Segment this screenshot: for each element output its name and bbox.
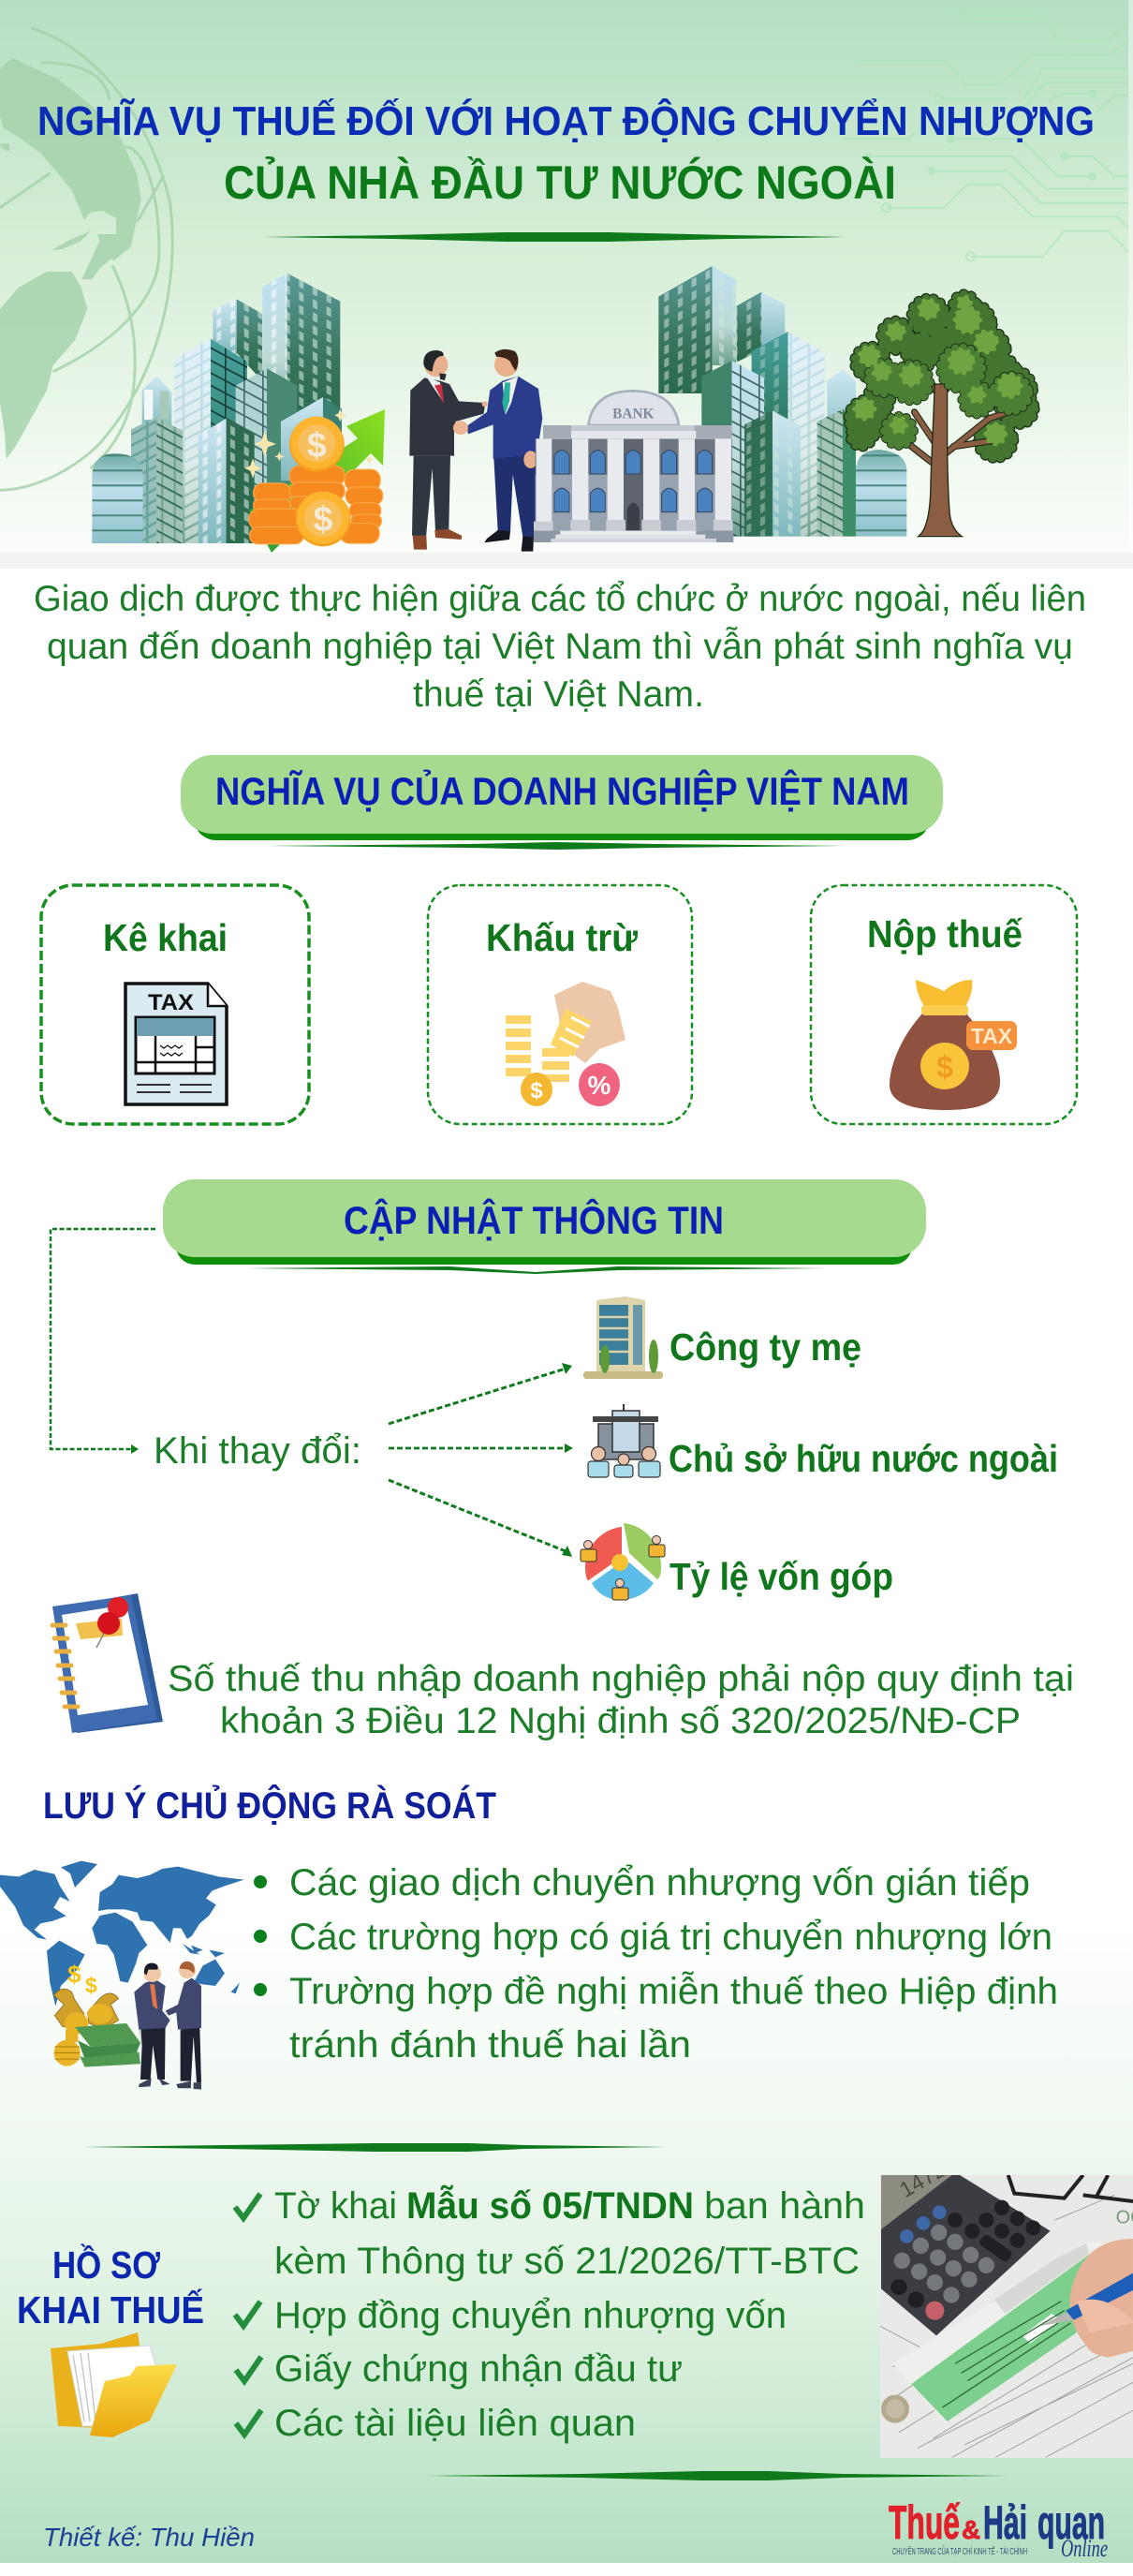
- money and bags: $: [85, 1973, 97, 1997]
- illustration: right buildings: [658, 266, 906, 537]
- heading: tax dossier: KHAI THUẾ: [17, 2288, 204, 2332]
- arrow: update connector: [51, 1229, 155, 1454]
- title: CỦA NHÀ ĐẦU TƯ NƯỚC NGOÀI: [224, 155, 896, 209]
- credit: designer: Thiết kế: Thu Hiền: [43, 2523, 255, 2552]
- icon: tax money bag: $: [936, 1050, 953, 1084]
- photo: calculator and tax form: [880, 2157, 1133, 2458]
- two investors: [134, 1962, 201, 2090]
- item 3: Giấy chứng nhận đầu tư: [274, 2348, 683, 2390]
- icon: office tower: [583, 1296, 663, 1379]
- icon: folder: [51, 2332, 177, 2437]
- bullet 2: Các trường hợp có giá trị chuyển nhượng lớn: [289, 1917, 1052, 1958]
- text: when changed: Khi thay đổi:: [154, 1430, 361, 1472]
- bullet 3: [254, 1970, 1058, 2065]
- icon: capital pie: [581, 1523, 665, 1600]
- text: tax note: [168, 1659, 1074, 1741]
- heading pill: update: [163, 1179, 926, 1274]
- intro text: [34, 579, 1086, 715]
- icon: world map and investors: [0, 1861, 244, 2090]
- arrow: to capital ratio: [389, 1480, 572, 1557]
- leaf highlights: [855, 297, 1021, 444]
- heading pill: obligations: [181, 755, 943, 850]
- panel: Kê khai: Kê khai: [103, 916, 228, 959]
- panel: Khấu trừ: Khấu trừ: [486, 916, 638, 959]
- logo: Thuế & Hải quan: Thuế: [889, 2496, 960, 2549]
- item 1: ban hành: [704, 2185, 865, 2227]
- text: tax note: khoản 3 Điều 12 Nghị định số 320/2025/NĐ-CP: [220, 1701, 1021, 1741]
- label: parent company: Công ty mẹ: [670, 1325, 861, 1369]
- icon: coins and hand: $: [530, 1078, 543, 1103]
- logo: Thuế & Hải quan: CHUYÊN TRANG CỦA TẠP CHÍ KINH TẾ - TÀI CHÍNH: [892, 2545, 1027, 2557]
- item 1: kèm Thông tư số 21/2026/TT-BTC: [274, 2241, 860, 2282]
- title: [37, 96, 1095, 209]
- label: capital ratio: Tỷ lệ vốn góp: [670, 1555, 893, 1598]
- logo: Thuế & Hải quan: &: [962, 2515, 980, 2544]
- logo: Thuế & Hải quan: Hải: [983, 2496, 1027, 2549]
- bullet 3: tránh đánh thuế hai lần: [289, 2024, 691, 2065]
- icon: tax form: TAX: [148, 990, 194, 1015]
- branches: [896, 381, 1018, 462]
- heading pill: update: CẬP NHẬT THÔNG TIN: [344, 1197, 724, 1242]
- panel: Khấu trừ: [428, 885, 692, 1124]
- logo: Thuế & Hải quan: [889, 2496, 1108, 2562]
- bullet 1: Các giao dịch chuyển nhượng vốn gián tiếp: [289, 1862, 1030, 1903]
- icon: growth arrow: [249, 409, 385, 553]
- panel: Nộp thuế: Nộp thuế: [867, 912, 1023, 955]
- icon: gold coins: $: [314, 499, 333, 539]
- item 1: Mẫu số 05/TNDN: [406, 2184, 694, 2227]
- illustration: left buildings: [92, 274, 342, 543]
- photo: calculator and tax form: 1472: [895, 2157, 949, 2202]
- item 1: [235, 2184, 865, 2282]
- list: dossier items: [235, 2184, 865, 2444]
- illustration: bank: BANK: [612, 407, 655, 422]
- globe watermark: [0, 28, 172, 490]
- panel: Kê khai: [41, 885, 309, 1124]
- money and bags: [53, 1961, 153, 2067]
- front canopy: [868, 348, 1029, 446]
- heading pill: obligations: NGHĨA VỤ CỦA DOANH NGHIỆP VIỆT NAM: [215, 768, 909, 813]
- icon: foreign owners: [588, 1404, 660, 1477]
- intro text: thuế tại Việt Nam.: [413, 674, 704, 715]
- illustration: tree: [848, 294, 1035, 537]
- icon: tax money bag: [890, 980, 1017, 1110]
- heading: tax dossier: [17, 2243, 204, 2332]
- logo: Thuế & Hải quan: Online: [1061, 2535, 1108, 2562]
- intro text: Giao dịch được thực hiện giữa các tổ chức ở nước ngoài, nếu liên: [34, 579, 1086, 619]
- arrow: to parent company: [389, 1363, 572, 1424]
- icon: gold coins: [244, 409, 383, 546]
- label: foreign owner: Chủ sở hữu nước ngoài: [669, 1437, 1058, 1480]
- icon: coins and hand: [506, 982, 625, 1106]
- text: tax note: Số thuế thu nhập doanh nghiệp phải nộp quy định tại: [168, 1659, 1074, 1699]
- list: review items: [254, 1862, 1058, 2065]
- icon: tax money bag: TAX: [971, 1024, 1013, 1048]
- arrow: to foreign owner: [389, 1443, 573, 1453]
- right man: [466, 349, 542, 552]
- left man: [409, 350, 485, 550]
- illustration: business men: [409, 349, 542, 552]
- money and bags: $: [67, 1961, 81, 1989]
- icon: gold coins: $: [307, 424, 327, 464]
- heading: tax dossier: HỒ SƠ: [52, 2243, 160, 2287]
- intro text: quan đến doanh nghiệp tại Việt Nam thì vẫn phát sinh nghĩa vụ: [47, 627, 1073, 667]
- item 2: Hợp đồng chuyển nhượng vốn: [274, 2295, 787, 2336]
- icon: tax form: [125, 984, 227, 1104]
- icon: pinned notepad: [52, 1593, 163, 1733]
- panel: Nộp thuế: [811, 885, 1077, 1124]
- heading: proactive review: LƯU Ý CHỦ ĐỘNG RÀ SOÁT: [43, 1784, 496, 1827]
- back canopy: [848, 294, 1035, 458]
- illustration: bank: [534, 391, 733, 542]
- icon: coins and hand: %: [588, 1071, 611, 1100]
- item 4: Các tài liệu liên quan: [274, 2403, 636, 2444]
- circuit pattern: [843, 11, 1128, 261]
- item 1: Tờ khai: [274, 2185, 397, 2227]
- bullet 3: Trường hợp đề nghị miễn thuế theo Hiệp định: [289, 1970, 1058, 2012]
